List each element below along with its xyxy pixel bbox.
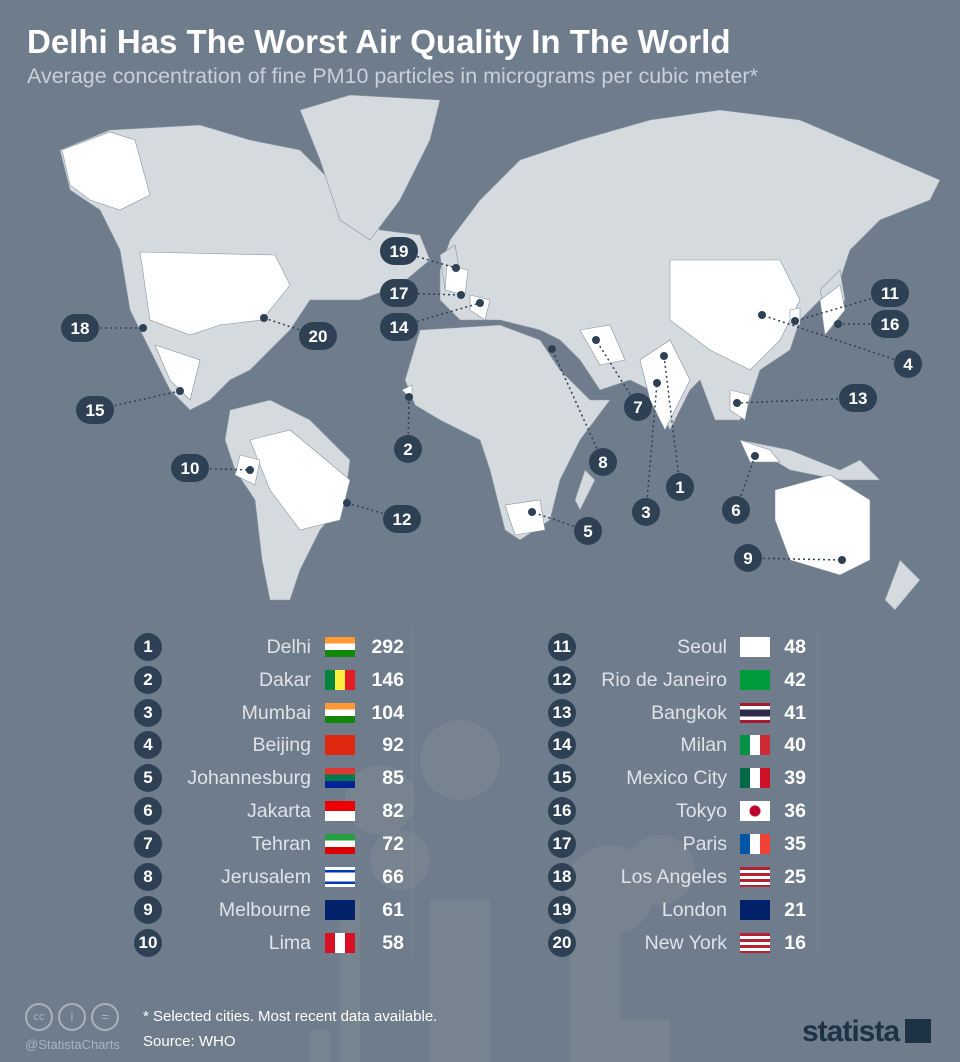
world map: 17 (390, 284, 408, 303)
list: left column: 1 (143, 637, 153, 656)
list: right column: 21 (784, 899, 806, 921)
list: left column: 292 (371, 636, 404, 658)
world map: 1 (675, 478, 685, 497)
list: left column: 146 (371, 669, 404, 691)
list: left column: 3 (143, 703, 153, 722)
list: left column: 8 (143, 867, 153, 886)
list: left column: 72 (382, 833, 404, 855)
divider lines (412, 630, 818, 955)
license icons: i (71, 1009, 73, 1024)
license icons: @StatistaCharts (25, 1037, 120, 1052)
list: right column: Bangkok (651, 702, 727, 724)
list: left column: 9 (143, 900, 153, 919)
footnote: * Selected cities. Most recent data available. (143, 1008, 437, 1025)
list: right column: 17 (553, 834, 571, 853)
list: left column: 61 (382, 899, 404, 921)
list: right column: 11 (553, 637, 571, 656)
footnote (143, 1008, 437, 1050)
list: right column: Tokyo (676, 800, 727, 822)
list: left column: 82 (382, 800, 404, 822)
footnote: Source: WHO (143, 1033, 236, 1050)
list: left column: Jakarta (247, 800, 311, 822)
list: left column: 6 (143, 801, 153, 820)
statista logo: statista (802, 1015, 899, 1048)
list: right column: 20 (553, 933, 571, 952)
list: right column: Mexico City (626, 767, 727, 789)
list: right column: Los Angeles (621, 866, 727, 888)
list: right column: 35 (784, 833, 806, 855)
subtitle: Average concentration of fine PM10 particles in micrograms per cubic meter* (27, 64, 758, 88)
list: left column: Tehran (251, 833, 311, 855)
list: right column: 12 (553, 670, 571, 689)
world map: 7 (633, 398, 643, 417)
list: right column: 15 (553, 768, 571, 787)
list: right column: Rio de Janeiro (601, 669, 727, 691)
list: left column: Beijing (252, 734, 311, 756)
list: right column: London (662, 899, 727, 921)
list: left column: Dakar (259, 669, 311, 691)
list: right column: 16 (553, 801, 571, 820)
list: right column: 13 (553, 703, 571, 722)
world map: 3 (641, 503, 651, 522)
world map: 15 (86, 401, 104, 420)
world map: 18 (71, 319, 89, 338)
list: right column: Milan (680, 734, 727, 756)
list: right column: 39 (784, 767, 806, 789)
list: left column: Johannesburg (187, 767, 311, 789)
list: right column: 36 (784, 800, 806, 822)
list: left column: 10 (139, 933, 157, 952)
world map: 14 (390, 318, 409, 337)
list: left column: 7 (143, 834, 153, 853)
list: left column: 2 (143, 670, 153, 689)
list: right column: 16 (784, 932, 806, 954)
list: right column: 40 (784, 734, 806, 756)
list: right column: Seoul (677, 636, 727, 658)
list: right column: 48 (784, 636, 806, 658)
list: left column: 4 (143, 735, 153, 754)
list: right column: 18 (553, 867, 571, 886)
world map: 16 (881, 315, 899, 334)
world map: 13 (849, 389, 867, 408)
list: left column: 58 (382, 932, 404, 954)
list: left column: Delhi (267, 636, 311, 658)
license icons: cc (34, 1011, 44, 1023)
list: right column: 19 (553, 900, 571, 919)
world map: 20 (309, 327, 327, 346)
world map: 2 (403, 440, 413, 459)
world map: 12 (393, 510, 411, 529)
world map: 9 (743, 549, 753, 568)
world map (60, 94, 940, 610)
list: left column: Mumbai (242, 702, 311, 724)
list: right column: 25 (784, 866, 806, 888)
list: left column: Lima (269, 932, 311, 954)
list: right column: 42 (784, 669, 806, 691)
world map: 11 (881, 284, 899, 303)
world map: 19 (390, 242, 408, 261)
title: Delhi Has The Worst Air Quality In The World (27, 23, 730, 60)
list: right column: 14 (553, 735, 571, 754)
list: left column: Jerusalem (221, 866, 311, 888)
world map: 4 (903, 355, 913, 374)
list: right column: Paris (683, 833, 727, 855)
world map: 8 (598, 453, 608, 472)
list: left column: 104 (371, 702, 404, 724)
list: left column: 66 (382, 866, 404, 888)
license icons: = (101, 1009, 109, 1024)
list: left column: 92 (382, 734, 404, 756)
world map: 6 (731, 501, 741, 520)
world map: 10 (181, 459, 199, 478)
list: left column: Melbourne (219, 899, 311, 921)
list: right column: New York (645, 932, 727, 954)
list: left column: 85 (382, 767, 404, 789)
license icons (25, 1003, 120, 1052)
world map: 5 (583, 522, 593, 541)
list: right column: 41 (784, 702, 806, 724)
list: left column: 5 (143, 768, 153, 787)
